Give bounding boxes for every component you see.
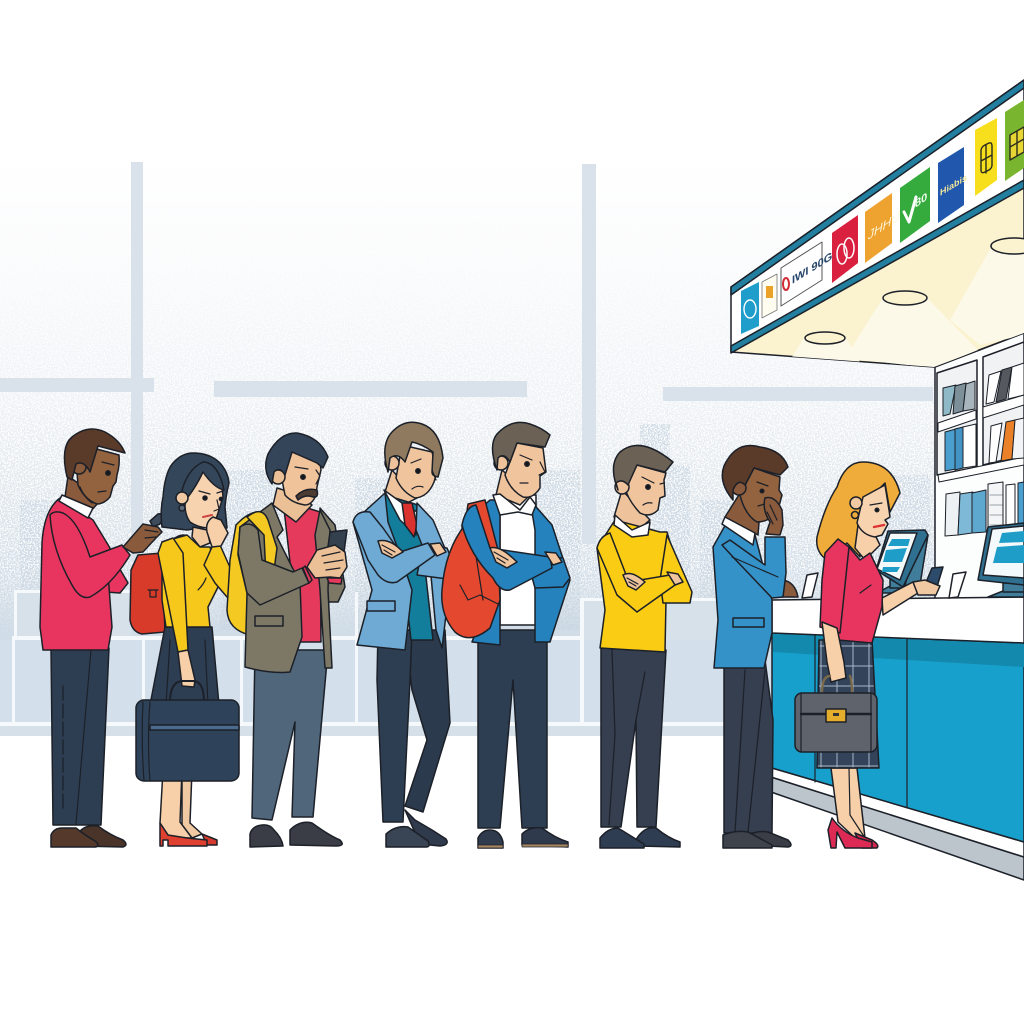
hair bbox=[817, 462, 900, 560]
far sleeve bbox=[105, 547, 128, 593]
person 4: light blue blazer bbox=[353, 422, 457, 847]
light cones bbox=[790, 246, 1024, 368]
jacket sleeve bbox=[238, 524, 309, 605]
shelving unit bbox=[935, 333, 1024, 600]
sweater bbox=[40, 498, 112, 650]
shirt bbox=[283, 500, 321, 642]
jacket right panel bbox=[315, 510, 332, 668]
counter front bbox=[772, 633, 1024, 842]
neck and head bbox=[496, 470, 530, 505]
terminal right bbox=[978, 523, 1024, 597]
hand on counter bbox=[781, 580, 798, 597]
legs bbox=[831, 768, 865, 838]
yellow backpack bbox=[227, 512, 275, 635]
far sleeve bbox=[530, 557, 570, 588]
card readers bbox=[802, 572, 966, 598]
skyline silhouettes bbox=[20, 424, 930, 635]
hand at cheek bbox=[207, 517, 228, 547]
trousers bbox=[724, 660, 773, 833]
shoes bbox=[405, 810, 447, 846]
shoes bbox=[478, 830, 503, 848]
long shelf bbox=[938, 457, 1024, 482]
trousers bbox=[405, 630, 450, 812]
shelf compartment left bbox=[937, 360, 977, 475]
yellow strap bbox=[247, 512, 277, 578]
shoes bbox=[250, 825, 283, 847]
near sleeve bbox=[597, 533, 675, 612]
jacket left panel bbox=[238, 503, 302, 672]
logo: green SIM chip bbox=[1005, 100, 1024, 181]
logo: orange bbox=[865, 193, 900, 263]
logo: green check bbox=[900, 167, 930, 243]
red pumps bbox=[202, 834, 217, 845]
red heels bbox=[855, 833, 878, 848]
logo: blue circle bbox=[741, 282, 759, 334]
person 5: blue blazer, red backpack bbox=[442, 422, 570, 848]
neck and head bbox=[385, 470, 417, 505]
books bbox=[943, 363, 1024, 536]
shoes bbox=[637, 828, 680, 847]
window mullions bbox=[0, 162, 933, 562]
neck and head bbox=[725, 490, 760, 535]
face bbox=[192, 527, 210, 547]
skirt bbox=[150, 627, 219, 705]
far sleeve bbox=[417, 547, 457, 580]
hand at nose bbox=[764, 498, 783, 535]
far sleeve bbox=[320, 508, 345, 602]
logo: green check: 80 bbox=[915, 189, 927, 211]
near sleeve bbox=[462, 505, 552, 590]
hair back bbox=[161, 453, 229, 530]
logo: yellow SIM chip bbox=[975, 118, 997, 196]
red backpack bbox=[130, 553, 165, 634]
near sleeve bbox=[353, 512, 435, 583]
arm and hand bbox=[822, 622, 846, 682]
recessed lights bbox=[805, 332, 845, 344]
person 8: blonde woman at counter bbox=[795, 462, 943, 848]
plaid skirt bbox=[817, 640, 879, 768]
person 6: yellow sweater bbox=[597, 445, 692, 848]
hands bbox=[623, 574, 645, 590]
counter bbox=[771, 597, 1024, 880]
legs bbox=[182, 770, 202, 838]
jacket bbox=[462, 500, 500, 645]
blazer bbox=[353, 493, 412, 650]
terminal left bbox=[876, 530, 928, 593]
hand and phone bbox=[150, 513, 165, 527]
sign band with logos bbox=[731, 80, 1024, 353]
crossed hands bbox=[378, 540, 403, 558]
counter top bbox=[772, 597, 1024, 643]
red backpack bbox=[442, 500, 500, 638]
neck and head bbox=[273, 488, 312, 522]
phone and hands bbox=[327, 530, 347, 554]
shirt bbox=[500, 495, 536, 625]
far sleeve bbox=[660, 535, 692, 603]
shelf compartment right bbox=[983, 342, 1024, 465]
neck and head bbox=[65, 476, 98, 511]
trousers bbox=[252, 650, 328, 820]
shoes bbox=[748, 832, 791, 847]
vest and shirt bbox=[385, 495, 433, 640]
grey briefcase with gold clasp bbox=[795, 676, 877, 752]
person 3: olive jacket with yellow backpack bbox=[227, 433, 347, 847]
logo: blue wordmark bbox=[938, 147, 968, 223]
logo: blue wordmark: Hiabis bbox=[940, 172, 968, 199]
counter base strip bbox=[771, 777, 1024, 880]
trousers bbox=[478, 630, 547, 828]
logo: wordmark bbox=[781, 242, 832, 306]
lower building blocks bbox=[0, 640, 940, 728]
person 2: woman in yellow with red backpack bbox=[130, 453, 239, 846]
logo: orange: JHHU bbox=[867, 208, 900, 243]
shoes bbox=[77, 826, 126, 847]
neck and face bbox=[855, 525, 880, 560]
background: window and skyline bbox=[0, 162, 934, 736]
blazer bbox=[713, 522, 772, 668]
neck and head bbox=[614, 490, 650, 535]
person 1: red sweater bbox=[40, 429, 165, 847]
sweater bbox=[597, 520, 684, 652]
dark briefcase bbox=[136, 681, 239, 781]
pink top bbox=[822, 547, 883, 643]
person 7: blue blazer at counter bbox=[713, 446, 798, 848]
logo: red rings bbox=[832, 215, 858, 283]
crossed hands bbox=[490, 548, 517, 568]
arm holding phone bbox=[882, 582, 918, 615]
illustration: queue at phone shop bbox=[0, 79, 1024, 881]
trousers bbox=[601, 648, 666, 827]
logo: wordmark: IWI 90G bbox=[792, 249, 832, 287]
yellow top bbox=[162, 535, 220, 627]
ceiling with lights bbox=[731, 187, 1024, 368]
logo: small card bbox=[762, 274, 777, 318]
